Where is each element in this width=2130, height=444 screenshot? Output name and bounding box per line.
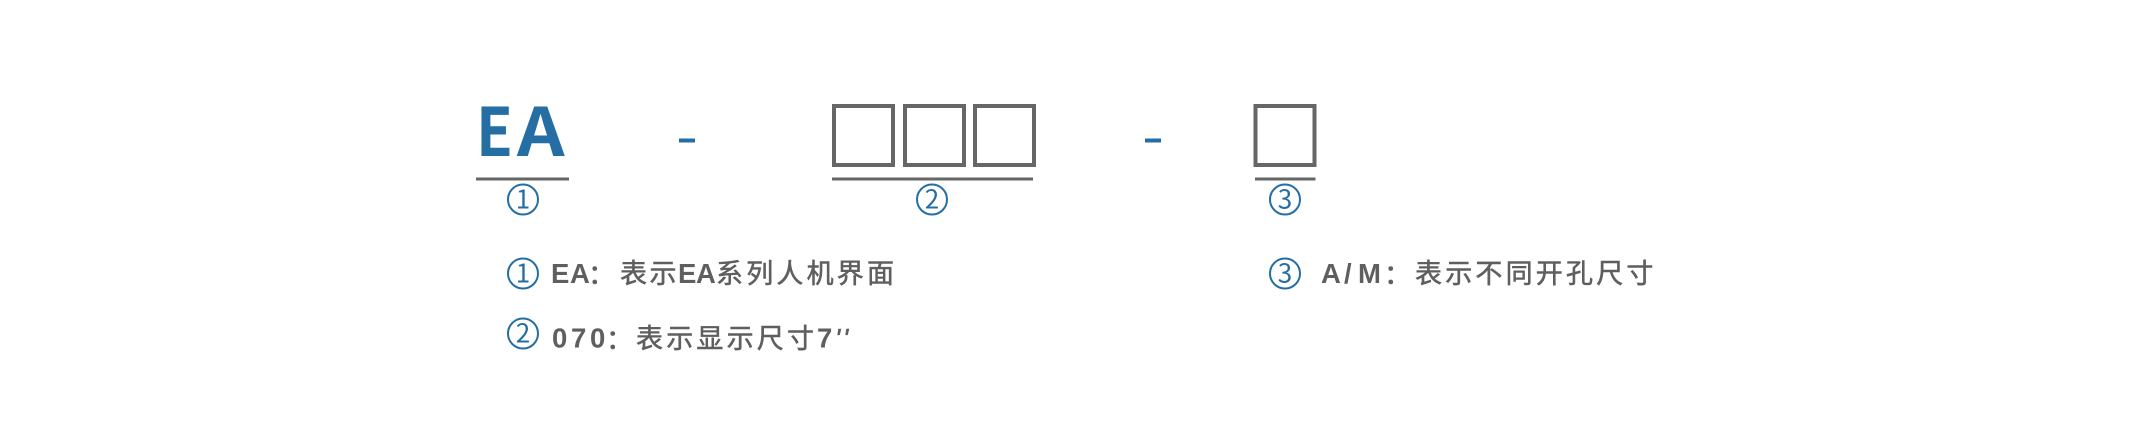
legend item 2: 表示显示尺寸 — [636, 317, 817, 356]
legend item 1: EA — [551, 258, 590, 289]
legend item 1 — [508, 252, 897, 292]
legend item 2 — [508, 314, 849, 357]
legend item 1: 表示 — [620, 252, 679, 291]
legend item 3 — [1270, 252, 1657, 292]
marker 3: 3 — [1278, 180, 1292, 216]
legend item 1: 系列人机界面 — [716, 252, 897, 291]
legend item 2: 2 — [516, 314, 530, 350]
segment 1: EA code: A — [516, 79, 566, 176]
marker 1: 1 — [516, 180, 530, 216]
legend item 1: 1 — [516, 254, 530, 290]
segment 1: EA code — [476, 79, 569, 216]
segment 2: three boxes — [832, 106, 1034, 216]
segment 1: EA code: E — [476, 79, 513, 176]
marker 2 — [917, 180, 947, 216]
legend item 3: 表示不同开孔尺寸 — [1415, 252, 1657, 291]
legend item 3: A/M — [1321, 258, 1381, 289]
legend item 2: '' — [835, 324, 849, 354]
legend item 2: 070 — [552, 322, 605, 354]
legend item 1: ： — [588, 253, 615, 292]
dash 2 — [1145, 138, 1161, 142]
dash 1 — [679, 138, 695, 142]
legend item 3: 3 — [1278, 254, 1292, 290]
segment 3: one box — [1255, 106, 1316, 216]
legend item 2: ： — [606, 318, 633, 357]
legend item 2: 7 — [817, 322, 832, 354]
legend item 1: EA — [678, 258, 716, 289]
legend item 3: ： — [1384, 253, 1411, 292]
marker 2: 2 — [925, 180, 939, 216]
